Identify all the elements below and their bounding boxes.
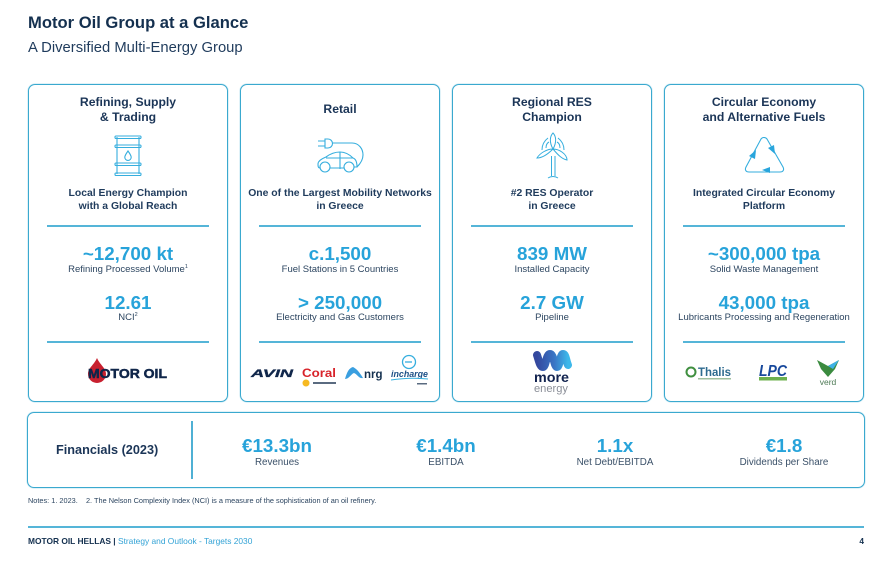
- logos: retail brands: AVIN: [249, 368, 295, 380]
- logos: circular economy brands: verd: [820, 377, 837, 387]
- logo: more energy: [532, 350, 572, 395]
- logo: Motor Oil: MOTOR OIL: [88, 366, 167, 381]
- metric: dividends per share: [740, 435, 828, 468]
- heading: [80, 95, 176, 124]
- metric: EBITDA: [416, 435, 476, 468]
- stat label: solid waste: Solid Waste Management: [710, 264, 818, 275]
- icon: oil barrel: [114, 136, 142, 176]
- logo: more energy: more: [534, 369, 569, 385]
- description: in Greece: [316, 200, 364, 212]
- heading: Refining, Supply: [80, 95, 176, 109]
- heading: Circular Economy: [712, 95, 816, 109]
- logos: retail brands: nrg: [364, 369, 383, 381]
- icon: recycling triangle: [744, 137, 784, 173]
- stat label: lubricants: Lubricants Processing and Regeneration: [678, 312, 850, 323]
- panel: refining, supply and trading: [28, 84, 228, 402]
- metric: net debt to EBITDA: Net Debt/EBITDA: [577, 457, 653, 468]
- stat label: NCI: NCI2: [118, 312, 138, 323]
- logo: Motor Oil: [88, 358, 167, 383]
- panel: retail: [240, 84, 440, 402]
- financials heading: Financials (2023): [56, 443, 158, 457]
- metric: dividends per share: Dividends per Share: [740, 457, 828, 468]
- heading: [703, 95, 825, 124]
- logos: circular economy brands: [686, 360, 839, 387]
- stat: lubricants: 43,000 tpa: [719, 292, 809, 313]
- stat label: customers: Electricity and Gas Customers: [276, 312, 404, 323]
- page number: 4: [859, 536, 864, 546]
- description: [510, 188, 594, 212]
- stat label: pipeline: Pipeline: [535, 312, 569, 323]
- logos: retail brands: Coral: [302, 368, 336, 380]
- metric: revenues: Revenues: [255, 457, 299, 468]
- metric: dividends per share: €1.8: [766, 435, 802, 456]
- metric: net debt to EBITDA: [577, 435, 654, 468]
- heading: Regional RES: [512, 95, 592, 109]
- metric: net debt to EBITDA: 1.1x: [597, 435, 633, 456]
- metric: EBITDA: EBITDA: [428, 457, 464, 468]
- icon: wind turbine: [536, 132, 568, 178]
- stat label: capacity: Installed Capacity: [514, 264, 589, 275]
- icon: electric car: [317, 138, 364, 172]
- stat: solid waste: ~300,000 tpa: [708, 243, 820, 264]
- description: [69, 188, 187, 212]
- stat: volume: ~12,700 kt: [83, 243, 173, 264]
- logos: circular economy brands: Thalis: [698, 367, 731, 379]
- heading: Champion: [522, 110, 582, 124]
- panel: financials: [27, 412, 865, 488]
- heading: and Alternative Fuels: [703, 110, 825, 124]
- metric: revenues: [242, 435, 312, 468]
- footer: MOTOR OIL HELLAS | Strategy and Outlook - Targets 2030: [28, 536, 252, 546]
- description: #2 RES Operator: [511, 188, 593, 199]
- description: One of the Largest Mobility Networks: [248, 188, 432, 199]
- description: [693, 188, 835, 212]
- panel: circular economy and alternative fuels: [664, 84, 864, 402]
- footnotes: Notes: 1. 2023. 2. The Nelson Complexity Index (NCI) is a measure of the sophistication of an oil refinery.: [28, 496, 376, 505]
- heading: & Trading: [100, 110, 156, 124]
- stat: fuel stations: c.1,500: [309, 243, 371, 264]
- logos: retail brands: [249, 354, 428, 386]
- title: Motor Oil Group at a Glance: [28, 13, 248, 32]
- logo: more energy: energy: [534, 383, 568, 395]
- stat: pipeline: 2.7 GW: [520, 292, 584, 313]
- stat label: fuel stations: Fuel Stations in 5 Countries: [282, 264, 398, 275]
- heading: [512, 95, 592, 124]
- metric: revenues: €13.3bn: [242, 435, 312, 456]
- logos: circular economy brands: LPC: [759, 363, 787, 380]
- stat label: volume: Refining Processed Volume1: [68, 264, 188, 275]
- description: Local Energy Champion: [69, 188, 187, 199]
- stat: capacity: 839 MW: [517, 243, 587, 264]
- subtitle: A Diversified Multi-Energy Group: [28, 40, 243, 56]
- description: with a Global Reach: [79, 200, 177, 212]
- logos: retail brands: incharge: [391, 369, 428, 379]
- metric: EBITDA: €1.4bn: [416, 435, 476, 456]
- description: [248, 188, 432, 212]
- stat: NCI: 12.61: [104, 292, 152, 313]
- description: Integrated Circular Economy: [693, 188, 835, 199]
- description: Platform: [743, 200, 785, 212]
- panel: regional RES champion: [452, 84, 652, 402]
- heading: Retail: [323, 102, 357, 116]
- description: in Greece: [528, 200, 576, 212]
- stat: customers: > 250,000: [298, 292, 382, 313]
